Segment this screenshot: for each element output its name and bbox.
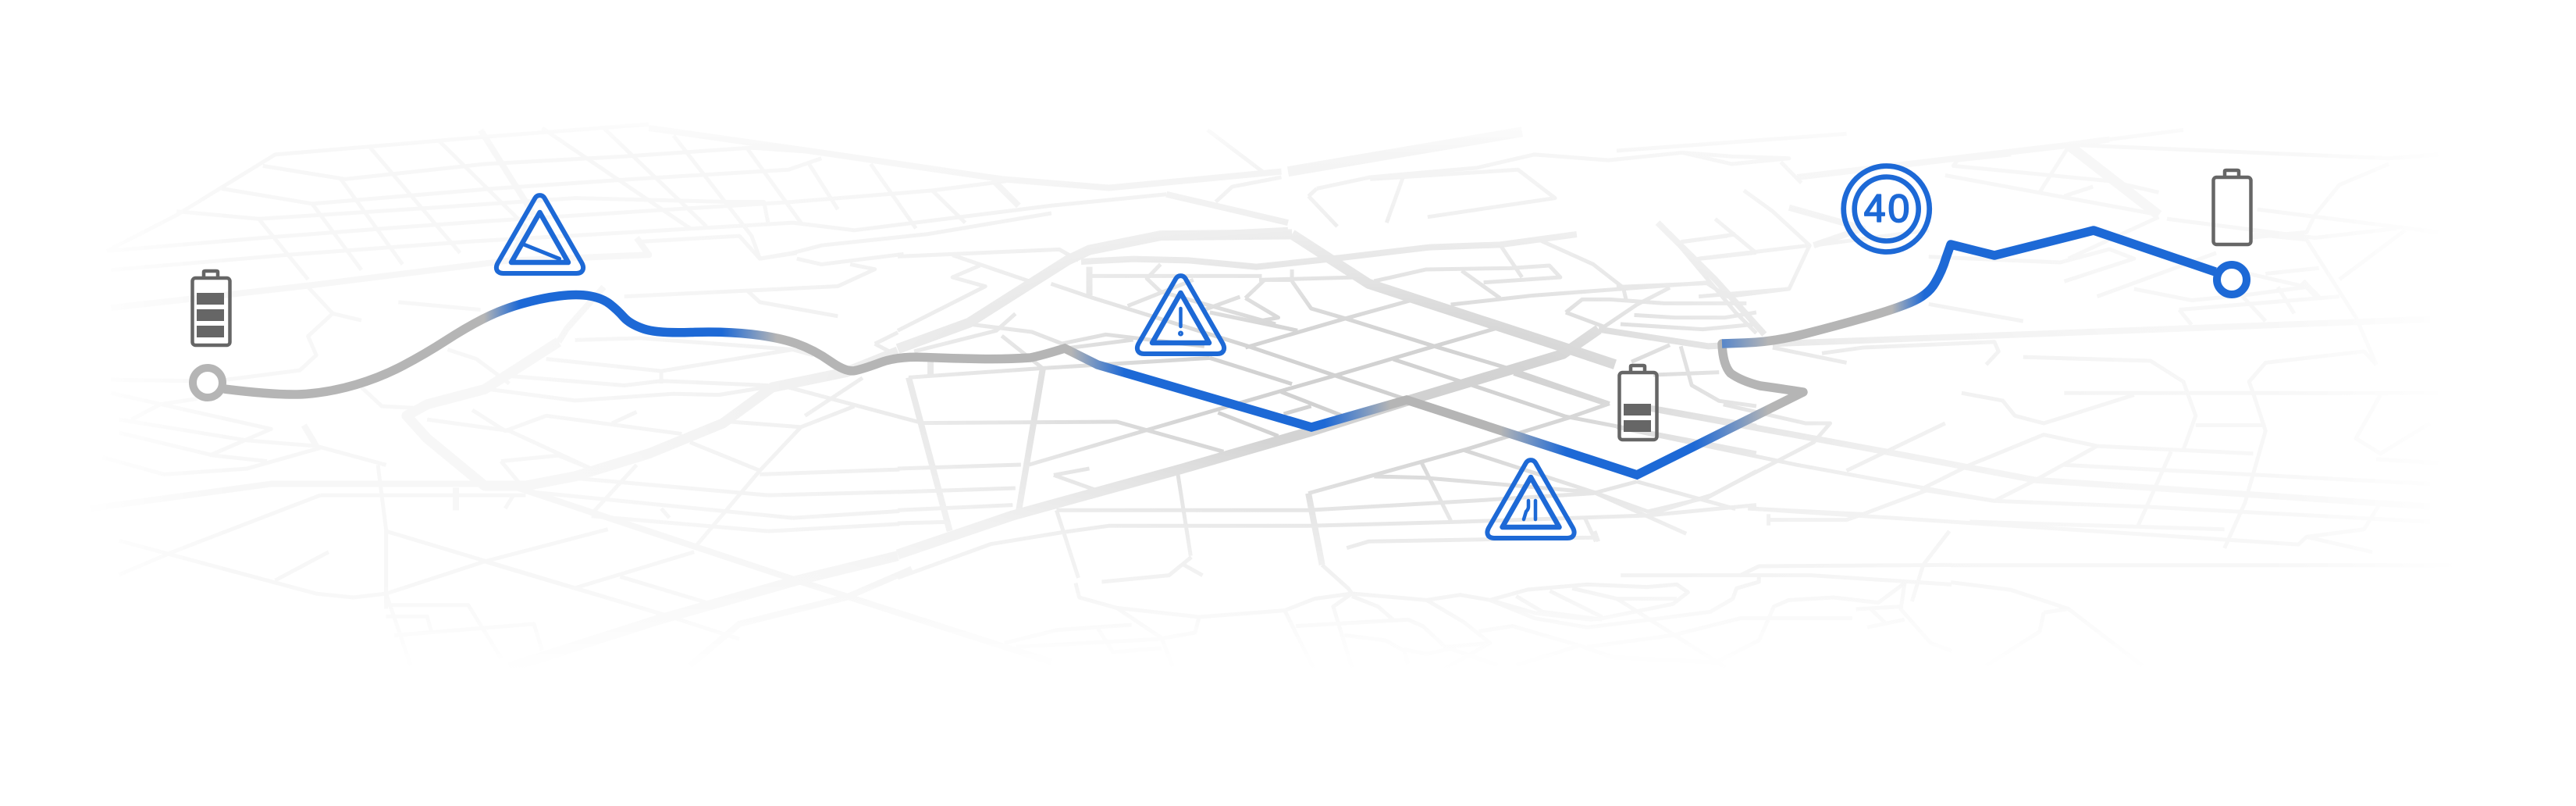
icon: warning sign exclamation xyxy=(1137,276,1224,354)
icon: battery three cells xyxy=(192,271,229,345)
icon: warning sign lane merge xyxy=(1487,460,1574,538)
route start marker xyxy=(193,368,222,398)
icon: warning sign road slope xyxy=(496,195,583,273)
icon: battery empty xyxy=(2214,170,2251,244)
icon: speed limit 40 sign: 40 xyxy=(1864,187,1912,230)
icon: battery two cells xyxy=(1619,366,1656,440)
route line xyxy=(224,230,2215,475)
route end marker xyxy=(2217,265,2247,294)
icon: speed limit 40 sign xyxy=(1844,166,1930,251)
